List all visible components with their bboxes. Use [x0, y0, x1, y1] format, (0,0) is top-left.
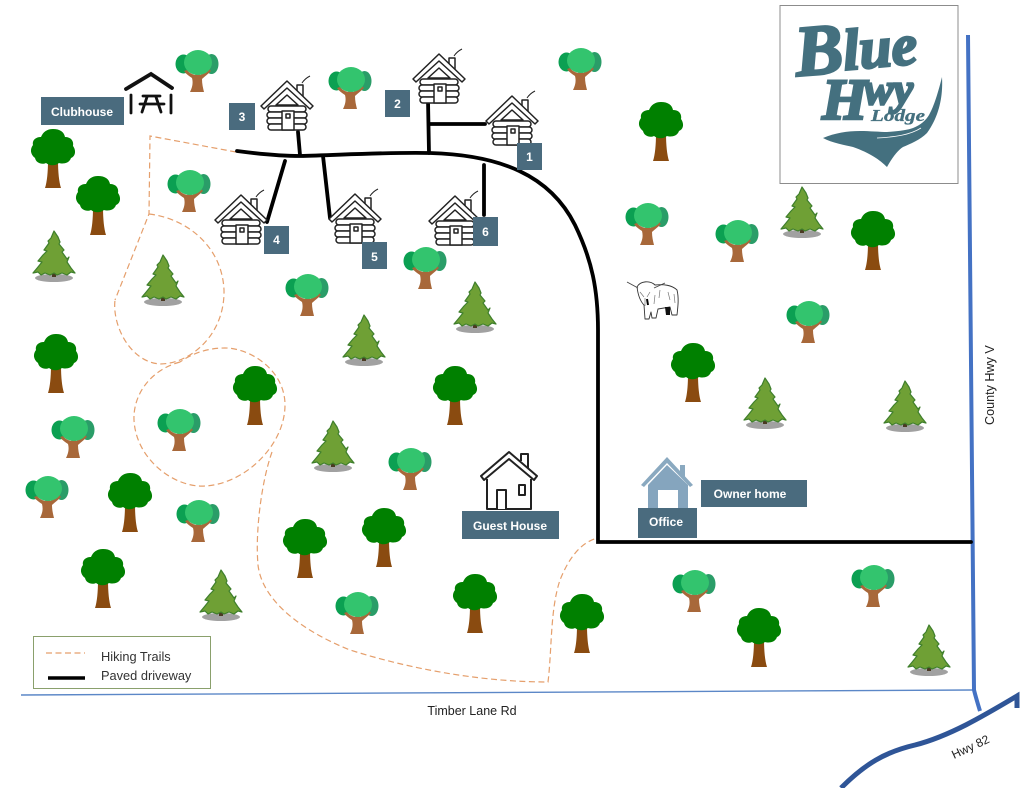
road label: Hwy 82: Hwy 82: [949, 732, 992, 762]
cabin 5: [329, 189, 381, 243]
icon: owner home: [641, 457, 693, 508]
hiking trails: [115, 136, 598, 682]
icon: clubhouse shelter: [126, 74, 172, 113]
pine trees: [33, 187, 950, 676]
label: Owner home: Owner home: [714, 487, 787, 501]
road label: County Hwy V: County Hwy V: [983, 345, 997, 425]
label: 5: [362, 242, 387, 269]
legend: paved driveway: Paved driveway: [101, 668, 192, 683]
label: Owner home: [701, 480, 807, 507]
label: 4: [264, 226, 289, 254]
icon: guest house: [481, 452, 537, 509]
oak trees: [31, 102, 895, 667]
label: Clubhouse: [41, 97, 124, 125]
cabin 2: [413, 49, 465, 103]
label: Office: [638, 508, 697, 538]
label: 3: 3: [239, 110, 246, 124]
cabin 6: [429, 191, 481, 245]
label: Clubhouse: Clubhouse: [51, 105, 113, 119]
road: Hwy 82: [841, 696, 1017, 788]
cabin 4: [215, 190, 267, 244]
logo word: Blue: lue: [840, 12, 920, 83]
logo word: Hwy: wy: [864, 65, 913, 114]
road label: Timber Lane Rd: Timber Lane Rd: [427, 704, 517, 718]
label: 6: 6: [482, 225, 489, 239]
round leafy trees: [26, 48, 894, 634]
legend: hiking trails: [46, 649, 171, 664]
label: Office: Office: [649, 515, 683, 529]
logo word: Lodge: Lodge: [870, 106, 926, 125]
label: 4: 4: [273, 233, 280, 247]
label: Guest House: [462, 511, 559, 539]
label: Guest House: Guest House: [473, 519, 547, 533]
logo word: Blue: B: [791, 8, 846, 92]
label: 1: [517, 143, 542, 170]
label: 2: [385, 90, 410, 117]
logo word: Hwy: H: [822, 67, 867, 132]
logo panel: [780, 2, 958, 183]
road: County Hwy V: [968, 35, 980, 711]
paved driveway: [237, 100, 971, 542]
legend: [34, 636, 210, 688]
legend: hiking trails: Hiking Trails: [101, 649, 171, 664]
label: 1: 1: [526, 150, 533, 164]
label: 5: 5: [371, 250, 378, 264]
icon: highland cow: [627, 282, 678, 319]
logo swoosh: [823, 77, 942, 167]
cabin 1: [486, 91, 538, 145]
label: 3: [229, 103, 255, 130]
cabin 3: [261, 76, 313, 130]
label: 6: [473, 217, 498, 246]
road: Timber Lane Rd: [21, 690, 972, 695]
label: 2: 2: [394, 97, 401, 111]
